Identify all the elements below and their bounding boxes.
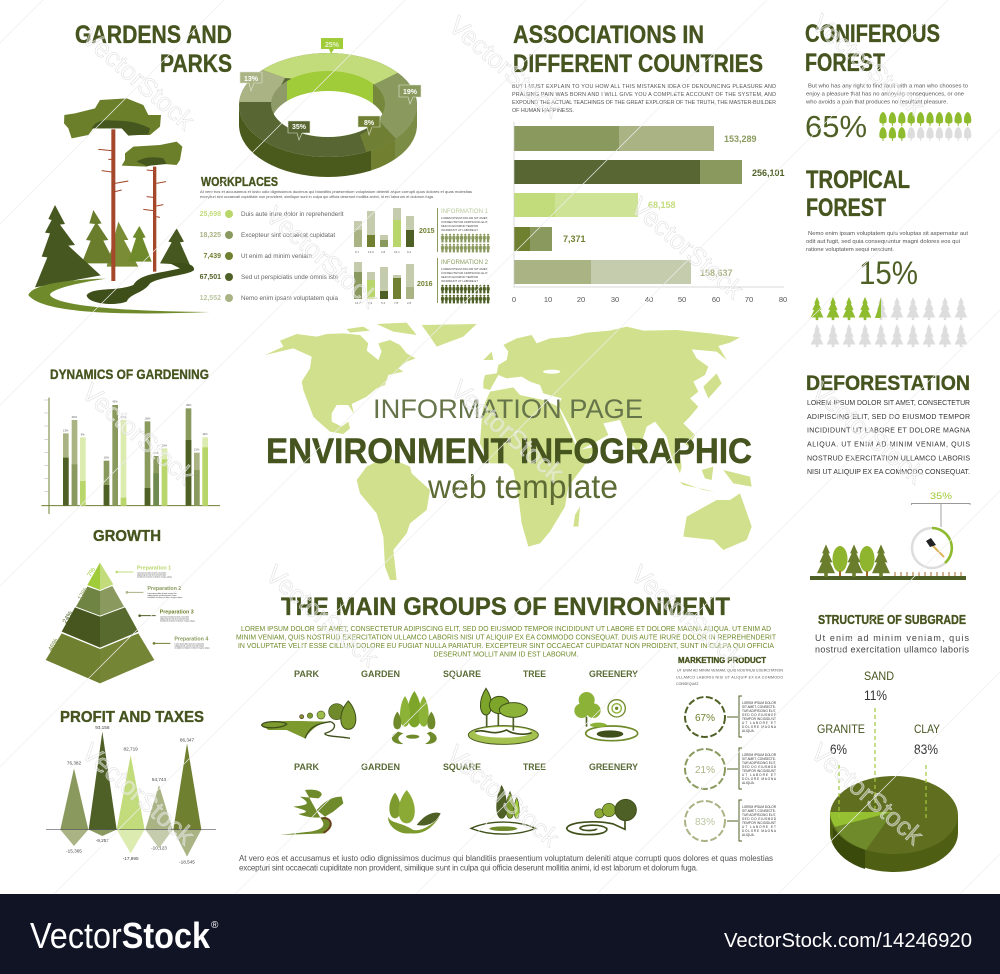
info block 2: INCIDIDUNT UT LABORE ET xyxy=(441,279,478,283)
watermarks: VectorStock xyxy=(441,739,566,853)
chart: triangles: -17,895 xyxy=(123,856,139,861)
stat: 83%: SED DO EIUSMOD xyxy=(742,817,777,821)
labels: sand, granite, clay: SAND xyxy=(864,669,894,683)
legend list: Ut enim ad minim veniam xyxy=(241,253,312,260)
callout: 8% xyxy=(358,116,380,135)
info block 2: SED DO EIUSMOD TEMPOR xyxy=(441,275,479,279)
label: preparation 3: incididunt ut labore et dolore magna aliqua xyxy=(160,619,196,622)
watermarks: VectorStock xyxy=(260,559,385,673)
text block: main groups intro xyxy=(236,626,777,658)
labels: sand, granite, clay: 83% xyxy=(914,741,938,757)
text block: tropical: odit aut fugit, sed quia consequuntur magni dolores eos qui xyxy=(806,239,960,245)
bar chart: dynamics: 26% xyxy=(145,416,151,420)
text block: marketing: ULLAMCO LABORIS NISI UT ALIQUIP EX EA COMMODO xyxy=(676,676,783,680)
label: preparation 1: adipisicing elit, sed do eiusmod tempor xyxy=(137,574,167,577)
bar chart: dynamics: 10% xyxy=(162,443,168,447)
chart: triangles: -18,545 xyxy=(179,859,195,864)
text block: main groups intro: LOREM IPSUM DOLOR SIT AMET, CONSECTETUR ADIPISCING ELIT, SED DO EIUSMOD TEMPOR INCIDIDUNT UT LABORE ET DOLORE MAGNA ALIQUA. UT ENIM AD xyxy=(241,626,771,633)
label: preparation 4 xyxy=(153,637,211,650)
bar chart: 2016: 7,8 xyxy=(394,301,399,305)
labels: row 1: PARK xyxy=(294,669,319,679)
chart: pyramid: 24% xyxy=(62,610,74,625)
text block: workplaces intro xyxy=(200,190,472,199)
panel: dynamics of gardening xyxy=(41,366,220,514)
stat: 21%: 21% xyxy=(695,765,715,776)
heading: profit and taxes: PROFIT AND TAXES xyxy=(60,709,204,726)
stat: 21%: LOREM IPSUM DOLOR xyxy=(742,753,777,757)
text block: deforestation: LOREM IPSUM DOLOR SIT AMET, CONSECTETUR xyxy=(807,400,970,407)
footer logo: VectorStock xyxy=(30,915,211,956)
legend list: 18,325 xyxy=(200,232,221,239)
text block: main groups intro: MINIM VENIAM, QUIS NOSTRUD EXERCITATION ULLAMCO LABORIS NISI UT ALIQUIP EX EA COMMODO CONSEQUAT. DUIS AUTE IRURE DOLOR IN REPREHENDERIT xyxy=(236,634,777,642)
footer band xyxy=(0,894,1000,974)
bar chart: dynamics: 21% xyxy=(194,448,200,452)
labels: row 2 xyxy=(294,762,638,772)
chart: triangles: 76,382 xyxy=(67,761,82,766)
text block: associations intro: OF HUMAN HAPPINESS. xyxy=(512,108,574,114)
panel: coniferous forest xyxy=(805,20,971,144)
info block 1: CONSECTETUR ADIPISCING ELIT, xyxy=(441,220,488,224)
stat: 67%: UT LABORE ET xyxy=(742,721,776,725)
stat: 21%: TUR ADIPISCING ELIT, xyxy=(742,761,776,765)
chart: triangles: 54,743 xyxy=(152,777,167,782)
callout: 19%: 19% xyxy=(403,89,418,96)
text block: deforestation: NISI UT ALIQUIP EX EA COMMODO CONSEQUAT. xyxy=(807,469,970,476)
text block: deforestation: INCIDIDUNT UT LABORE ET DOLORE MAGNA xyxy=(807,428,970,434)
stat: 67%: ALIQUA. xyxy=(742,729,755,733)
text block: subgrade: Ut enim ad minim veniam, quis xyxy=(815,633,970,643)
legend list: 12,552 xyxy=(200,295,221,302)
callout: 19% xyxy=(399,85,421,104)
info block 2: CONSECTETUR ADIPISCING ELIT, xyxy=(441,271,488,275)
labels: row 1: GARDEN xyxy=(361,669,400,679)
stat: 67%: 67% xyxy=(695,713,715,724)
text block: tropical: Nemo enim ipsam voluptatem quia voluptas sit aspernatur aut xyxy=(808,231,969,237)
stat: 67% xyxy=(685,696,777,737)
stat: 67%: TEMPOR INCIDIDUNT xyxy=(742,717,776,721)
labels: sand, granite, clay: 6% xyxy=(830,741,847,757)
bar chart: dynamics: 26% xyxy=(72,415,78,419)
bar chart: 2016: 5,4 xyxy=(381,301,386,305)
labels: sand, granite, clay: 11% xyxy=(864,687,887,703)
text block: deforestation xyxy=(807,400,970,476)
chart: 3D donut xyxy=(239,38,422,177)
heading: gardens and parks xyxy=(75,21,232,78)
text block: associations intro: EXPOUND THE ACTUAL TEACHINGS OF THE GREAT EXPLORER OF THE TRUTH, THE MASTER-BUILDER xyxy=(512,100,776,106)
chart: triangles: -10,123 xyxy=(151,845,167,850)
stat: 21%: UT LABORE ET xyxy=(742,773,776,777)
legend list: 67,501 xyxy=(200,274,221,281)
bar chart: associations: 10 xyxy=(544,295,552,304)
panel: main groups of environment xyxy=(236,593,777,872)
footer url: VectorStock.com/14246920 xyxy=(724,930,972,952)
callout: 35%: 35% xyxy=(292,124,307,131)
icons xyxy=(262,688,638,835)
illustration: felled forest xyxy=(810,544,966,580)
stat: 83% xyxy=(685,800,777,841)
panel: profit and taxes xyxy=(46,709,216,864)
chart: triangles: -15,365 xyxy=(66,849,82,854)
labels: sand, granite, clay: GRANITE xyxy=(817,722,865,736)
stat: 83%: UT LABORE ET xyxy=(742,825,776,829)
stat: 67%: TUR ADIPISCING ELIT, xyxy=(742,709,776,713)
callout: 25%: 25% xyxy=(325,42,340,49)
bar chart: dynamics xyxy=(41,398,220,514)
chart: 3D pie xyxy=(830,708,958,872)
labels: row 1: SQUARE xyxy=(443,669,481,679)
label: preparation 4: incididunt ut labore et dolore magna aliqua xyxy=(175,647,211,650)
bar chart: associations: 7,371 xyxy=(563,234,586,244)
bar chart: associations: 80 xyxy=(779,295,787,304)
text block: main groups footer xyxy=(239,854,773,872)
bar chart: dynamics: 27% xyxy=(121,415,127,419)
bar chart: associations: 0 xyxy=(512,295,516,304)
label: preparation 3: adipisicing elit, sed do eiusmod tempor xyxy=(160,617,190,620)
bar chart: dynamics: 27% xyxy=(153,451,159,455)
panel: tropical forest xyxy=(806,166,969,347)
stat: 83%: ALIQUA. xyxy=(742,833,755,837)
text block: coniferous: enjoy a pleasure that has no annoying consequences, or one xyxy=(806,92,964,98)
text block: coniferous: But who has any right to find fault with a man who chooses to xyxy=(808,84,968,90)
bar chart: 2015 xyxy=(354,208,435,254)
bar chart: associations: 153,289 xyxy=(724,134,757,144)
text block: associations intro xyxy=(512,84,776,114)
chart: pyramid xyxy=(46,563,211,683)
bar chart: 2016: 14,7 xyxy=(355,301,361,305)
info block 2 xyxy=(437,258,490,303)
info block 1: LOREM IPSUM DOLOR SIT AMET, xyxy=(441,216,488,220)
watermarks: VectorStock xyxy=(805,737,930,851)
world map xyxy=(265,323,752,580)
heading: coniferous forest: FOREST xyxy=(805,49,885,77)
text block: main groups intro: IN VOLUPTATE VELIT ESSE CILLUM DOLORE EU FUGIAT NULLA PARIATUR. EXCEPTEUR SINT OCCAECAT CUPIDATAT NON PROIDENT, SUNT IN CULPA QUI OFFICIA xyxy=(238,643,774,650)
bar chart: 2015: 9,7 xyxy=(355,250,360,254)
info block 2: LOREM IPSUM DOLOR SIT AMET, xyxy=(441,267,488,271)
text block: marketing xyxy=(676,668,783,686)
heading: associations: DIFFERENT COUNTRIES xyxy=(513,50,763,78)
stat: 83%: 83% xyxy=(695,817,715,828)
bar chart: associations xyxy=(512,122,787,304)
watermarks: VectorStock xyxy=(260,200,385,314)
stat: 67%: DOLORE MAGNA xyxy=(742,725,777,729)
label: preparation 3 xyxy=(138,609,196,622)
panel: workplaces xyxy=(200,174,490,305)
title: environment infographic: ENVIRONMENT INFOGRAPHIC xyxy=(266,432,752,471)
label: preparation 1 xyxy=(115,566,173,579)
bar chart: associations: 60 xyxy=(712,295,720,304)
icon: spiral greenery xyxy=(567,799,636,835)
panel: associations in different countries xyxy=(512,21,787,304)
legend list: Excepteur sint occaecat cupidatat xyxy=(241,232,335,239)
labels: row 2: GARDEN xyxy=(361,762,400,772)
text block: tropical: ratione voluptatem sequi nesciunt. xyxy=(806,247,894,253)
heading: coniferous forest xyxy=(805,20,940,77)
legend list: 25,698 xyxy=(200,211,221,218)
watermarks: VectorStock xyxy=(625,191,750,305)
label: preparation 2 xyxy=(126,586,183,599)
icon: garden xyxy=(392,691,437,744)
labels: row 2: TREE xyxy=(523,762,546,772)
bar chart: dynamics: 16% xyxy=(104,456,110,460)
text block: deforestation: NOSTRUD EXERCITATION ULLAMCO LABORIS xyxy=(807,456,970,462)
watermarks: VectorStock xyxy=(76,22,201,136)
pictogram: tropical trees xyxy=(811,297,967,347)
chart: triangles: 82,719 xyxy=(124,747,138,752)
labels: row 1: TREE xyxy=(523,669,546,679)
text block: coniferous xyxy=(806,84,968,106)
bar chart: associations: 68,158 xyxy=(648,200,676,210)
heading: associations xyxy=(513,21,763,78)
heading: tropical forest xyxy=(806,166,910,222)
watermarks: VectorStock xyxy=(76,377,201,491)
text block: marketing: CONSEQUAT. xyxy=(676,682,699,686)
text block: workplaces intro: At vero eos et accusamus et iusto odio dignissimos ducimus qui blanditiis praesentium voluptatum deleniti atque corrupti quos dolores et quas molestias xyxy=(200,190,472,194)
heading: coniferous forest: CONIFEROUS xyxy=(805,20,940,48)
icon: square xyxy=(468,688,538,744)
chart: pyramid: 12% xyxy=(77,587,89,602)
text block: main groups footer: At vero eos et accusamus et iusto odio dignissimos ducimus qui blanditiis praesentium voluptatum deleniti atque corrupti quos dolores et quas molestias xyxy=(239,854,773,863)
stat: 21%: TEMPOR INCIDIDUNT xyxy=(742,769,776,773)
stat: 83%: TUR ADIPISCING ELIT, xyxy=(742,813,776,817)
label: preparation 1: incididunt ut labore et dolore magna aliqua xyxy=(137,576,173,579)
stat: 83%: DOLORE MAGNA xyxy=(742,829,777,833)
heading: marketing product: MARKETING PRODUCT xyxy=(678,655,767,665)
bar chart: dynamics: 13% xyxy=(63,428,69,432)
stat: 83%: TEMPOR INCIDIDUNT xyxy=(742,821,776,825)
pictogram: coniferous trees xyxy=(879,112,971,141)
bar chart: associations: 50 xyxy=(678,295,686,304)
labels: row 1 xyxy=(294,669,638,679)
bar chart: 2015: 2015 xyxy=(419,228,435,235)
stat: 83%: LOREM IPSUM DOLOR xyxy=(742,805,777,809)
icon: axe gauge xyxy=(912,528,952,568)
callout: 13%: 13% xyxy=(244,76,259,83)
panel: marketing product xyxy=(676,655,783,841)
label: preparation 2: incididunt ut labore et dolore magna aliqua xyxy=(147,596,183,599)
watermarks: VectorStock xyxy=(806,8,931,122)
bar chart: associations: 256,101 xyxy=(752,168,785,178)
bar chart: dynamics: 42% xyxy=(112,400,118,404)
text block: tropical xyxy=(806,231,969,253)
labels: row 2: PARK xyxy=(294,762,319,772)
text block: deforestation: ADIPISCING ELIT, SED DO EIUSMOD TEMPOR xyxy=(807,414,970,421)
text block: deforestation: ALIQUA. UT ENIM AD MINIM VENIAM, QUIS xyxy=(807,442,970,448)
chart: pyramid: 7% xyxy=(86,566,97,578)
legend list: 7,439 xyxy=(203,253,221,260)
callout: 13% xyxy=(240,72,262,91)
panel: deforestation xyxy=(806,372,970,580)
watermarks: VectorStock xyxy=(443,10,568,124)
legend list xyxy=(200,210,344,302)
heading: associations: ASSOCIATIONS IN xyxy=(513,21,704,49)
panel: growth xyxy=(46,528,211,683)
label: preparation 4: Preparation 4 xyxy=(174,637,208,643)
bar chart: associations: 30 xyxy=(611,295,619,304)
text block: coniferous: who avoids a pain that produces no resultant pleasure. xyxy=(806,100,948,106)
text block: associations intro: PRAISING PAIN WAS BORN AND I WILL GIVE YOU A COMPLETE ACCOUNT OF THE SYSTEM, AND xyxy=(512,92,776,98)
text block: subgrade: nostrud exercitation ullamco laboris xyxy=(815,644,970,654)
heading: main groups: THE MAIN GROUPS OF ENVIRONMENT xyxy=(281,593,730,621)
chart: triangles xyxy=(46,725,216,864)
stat: 83%: SIT AMET, CONSECTE- xyxy=(742,809,776,813)
panel: world map with title xyxy=(265,323,752,580)
labels: row 2: SQUARE xyxy=(443,762,481,772)
labels: row 1: GREENERY xyxy=(589,669,638,679)
stat: 15%: 15% xyxy=(859,255,918,291)
bar chart: 2016: 2016 xyxy=(417,281,433,288)
heading: growth: GROWTH xyxy=(93,528,161,545)
stat: 67%: LOREM IPSUM DOLOR xyxy=(742,701,777,705)
label: preparation 2: adipisicing elit, sed do eiusmod tempor xyxy=(147,594,177,597)
labels: sand, granite, clay: CLAY xyxy=(914,722,940,736)
watermarks xyxy=(76,8,931,853)
legend list: Duis aute irure dolor in reprehenderit xyxy=(241,211,344,218)
text block: main groups intro: DESERUNT MOLLIT ANIM ID EST LABORUM. xyxy=(434,652,579,658)
icon: square trees xyxy=(471,786,536,834)
info block 1: INCIDIDUNT UT LABORE ET xyxy=(441,228,478,232)
heading: tropical forest: FOREST xyxy=(806,194,886,222)
bar chart: dynamics: 12% xyxy=(202,432,208,436)
bar chart: 2015: 13,9 xyxy=(368,250,374,254)
legend list: Nemo enim ipsam voluptatem quia xyxy=(241,295,338,302)
info block 2: INFORMATION 2 xyxy=(441,259,488,266)
text block: associations intro: BUT I MUST EXPLAIN TO YOU HOW ALL THIS MISTAKEN IDEA OF DENOUNCING PLEASURE AND xyxy=(512,84,776,90)
heading: gardens and parks: PARKS xyxy=(160,50,232,78)
label: preparation 1: Lorem ipsum dolor sit amet, consectetur xyxy=(137,572,167,575)
watermarks: VectorStock xyxy=(445,374,570,488)
watermarks: VectorStock xyxy=(625,559,750,673)
info block 1 xyxy=(437,208,490,252)
watermarks: VectorStock xyxy=(76,737,201,851)
bar chart: associations: 20 xyxy=(577,295,585,304)
icon: park tree xyxy=(280,790,343,835)
heading: structure of subgrade: STRUCTURE OF SUBGRADE xyxy=(818,613,966,627)
label: preparation 4: Lorem ipsum dolor sit amet, consectetur xyxy=(175,643,204,646)
icon: garden leaves xyxy=(388,790,441,834)
label: preparation 3: Preparation 3 xyxy=(160,609,194,615)
callout: 8%: 8% xyxy=(364,120,375,127)
bar chart: 2016 xyxy=(354,262,433,305)
label: preparation 2: Preparation 2 xyxy=(147,586,181,592)
stat: 35% with bracket xyxy=(912,491,970,527)
heading: workplaces: WORKPLACES xyxy=(201,174,278,189)
stat: 21%: SED DO EIUSMOD xyxy=(742,765,777,769)
text block: main groups footer: excepturi sint occaecati cupiditate non provident, similique sunt in culpa qui officia deserunt mollitia animi, id est laborum et dolorum fuga. xyxy=(239,864,698,872)
label: preparation 4: adipisicing elit, sed do eiusmod tempor xyxy=(175,645,204,648)
bar chart: 2016: 2,8 xyxy=(407,301,412,305)
panel: structure of subgrade xyxy=(815,613,970,872)
bar chart: dynamics: 39% xyxy=(186,403,192,407)
bar chart: dynamics: 9% xyxy=(81,432,85,436)
chart: triangles: 93,158 xyxy=(95,725,110,730)
label: preparation 3: Lorem ipsum dolor sit amet, consectetur xyxy=(160,615,190,618)
stat: 21%: SIT AMET, CONSECTE- xyxy=(742,757,776,761)
bar chart: 2015: 2,8 xyxy=(381,250,386,254)
callout: 25% xyxy=(321,38,343,54)
footer registered mark: ® xyxy=(211,920,219,931)
icon: park xyxy=(262,701,356,738)
bar chart: 2015: 9,4 xyxy=(407,250,412,254)
info block 1: SED DO EIUSMOD TEMPOR xyxy=(441,224,479,228)
stat: 35% with bracket: 35% xyxy=(930,491,952,501)
stat: 65%: 65% xyxy=(805,109,867,144)
bar chart: associations: 70 xyxy=(745,295,753,304)
heading: gardens and parks: GARDENS AND xyxy=(75,21,232,49)
label: preparation 2: Lorem ipsum dolor sit amet, consectetur xyxy=(147,592,177,595)
stat: 21%: ALIQUA. xyxy=(742,781,755,785)
stat: 67%: SIT AMET, CONSECTE- xyxy=(742,705,776,709)
labels: sand, granite, clay xyxy=(817,669,940,757)
bar chart: associations: 40 xyxy=(645,295,653,304)
stat: 67%: SED DO EIUSMOD xyxy=(742,713,777,717)
bar chart: 2016: 8,9 xyxy=(368,301,373,305)
title: web template: web template xyxy=(427,468,618,505)
illustration: pine trees and path xyxy=(28,98,210,313)
bar chart: associations: 158,637 xyxy=(700,268,733,278)
bar chart: 2015: 15,1 xyxy=(394,250,400,254)
icon: greenery xyxy=(574,692,638,741)
labels: row 2: GREENERY xyxy=(589,762,638,772)
info block 1: INFORMATION 1 xyxy=(441,208,488,215)
heading: dynamics: DYNAMICS OF GARDENING xyxy=(50,366,209,382)
callout: 35% xyxy=(288,121,310,140)
watermarks: VectorStock xyxy=(806,376,931,490)
label: preparation 1: Preparation 1 xyxy=(137,566,171,572)
stat: 21% xyxy=(685,748,777,789)
heading: tropical forest: TROPICAL xyxy=(806,166,910,194)
chart: pyramid: 46% xyxy=(47,638,60,653)
text block: marketing: UT ENIM AD MINIM VENIAM, QUIS NOSTRUD EXERCITATION xyxy=(677,668,783,672)
legend list: Sed ut perspiciatis unde omnis iste xyxy=(241,274,339,281)
title: information page: INFORMATION PAGE xyxy=(373,394,643,424)
panel: gardens and parks xyxy=(28,21,232,313)
chart: triangles: 86,347 xyxy=(180,738,195,743)
chart: triangles: -9,257 xyxy=(96,838,109,843)
text block: subgrade xyxy=(815,633,970,654)
stat: 21%: DOLORE MAGNA xyxy=(742,777,777,781)
text block: workplaces intro: excepturi sint occaecati cupiditate non provident, similique sunt in culpa qui officia deserunt mollitia animi, id est laborum et dolorum fuga. xyxy=(200,195,434,199)
heading: deforestation: DEFORESTATION xyxy=(806,372,970,395)
